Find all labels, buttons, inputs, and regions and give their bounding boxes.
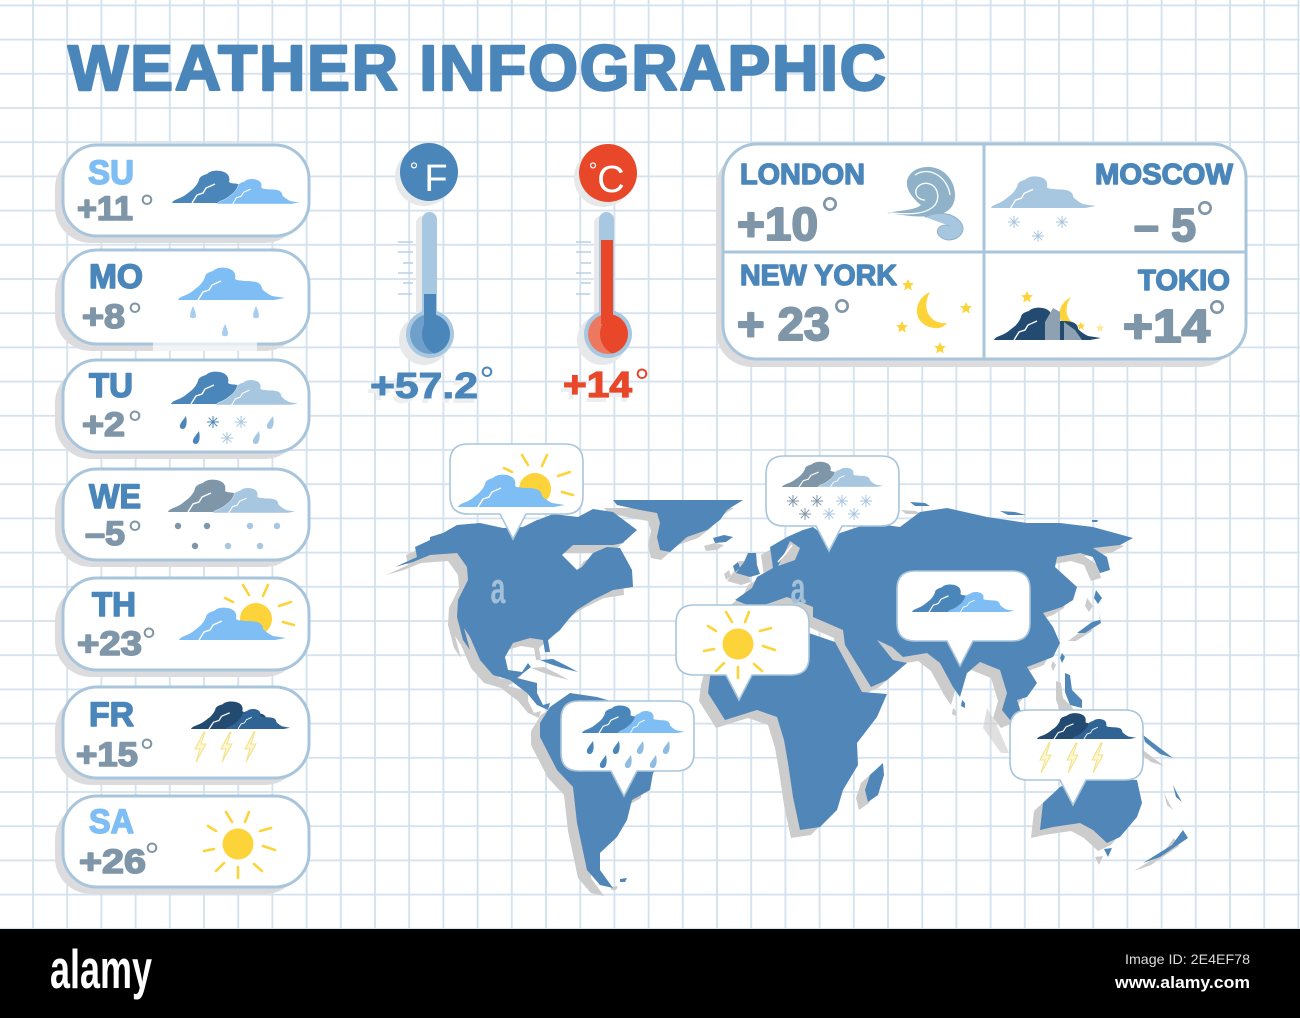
day card: Thursday: ° [141,621,157,663]
callout: Russia [766,456,899,551]
Celsius value: +14 [559,369,631,410]
panel: city temperatures [716,144,1246,367]
callout: Africa [676,605,809,700]
day card: Tuesday [55,360,309,459]
footer logo: alamy [50,938,152,1000]
callout: North America [450,444,583,539]
city: Tokio: ° [1207,290,1227,346]
day card: Friday: +15 [76,736,138,774]
day card: Thursday: +23 [77,625,142,663]
callout: Australia [1010,710,1143,805]
icon: Celsius badge: C [597,159,625,201]
day card: Wednesday: ° [127,514,143,556]
icon: Celsius badge: ° [589,158,597,183]
title: WEATHER INFOGRAPHIC [68,32,886,104]
city: New York [737,260,972,354]
map shadow [386,508,1179,896]
city: Moscow: – 5 [1134,199,1196,251]
Fahrenheit value: ° [479,360,495,402]
city: London: +10 [737,198,818,250]
day card: Tuesday: TU [89,367,133,405]
day card: Saturday: ° [144,836,160,878]
day card: Sunday: ° [139,188,155,230]
icon: Fahrenheit badge: ° [410,158,418,183]
city: New York: NEW YORK [740,260,897,292]
Fahrenheit value: +57.2 [370,365,478,406]
day card: Monday: +8 [82,298,125,336]
footer band [0,929,1300,1018]
icon: Fahrenheit badge [395,143,458,206]
day card: Wednesday: –5 [85,515,125,553]
panel: Celsius thermometer [559,144,650,410]
footer url: www.alamy.com [1114,973,1250,992]
day card: Sunday [55,145,309,243]
day card: Tuesday: +2 [82,406,125,444]
city: Moscow: ° [1195,191,1215,247]
day card: Thursday: TH [92,586,136,624]
city: London [737,159,963,250]
city: Tokio [994,265,1230,352]
day card: Friday: FR [89,696,134,734]
day card: Saturday: +26 [79,843,146,881]
city: London: LONDON [740,159,865,191]
map continents [395,500,1188,888]
day card: Saturday: SA [89,803,134,841]
Celsius value [559,362,650,410]
day card: Friday: ° [139,732,155,774]
Celsius value: ° [634,362,650,404]
day card: Sunday: SU [88,154,134,192]
day card: Monday: MO [89,258,143,296]
day card: Friday [55,687,309,785]
city: New York: + 23 [737,298,830,350]
city: Tokio: +14 [1123,300,1210,352]
city: Moscow [991,159,1234,251]
watermark letters [490,564,806,613]
day card: Tuesday: ° [127,404,143,446]
Fahrenheit value: +57.2 [366,370,476,411]
icon: Fahrenheit badge: F [424,158,448,200]
day card: Saturday [55,796,309,894]
day card: Thursday [55,578,309,677]
day card: Monday [55,250,309,351]
icon: Fahrenheit thermometer [398,212,454,365]
city: London: ° [820,187,840,243]
Fahrenheit value [366,360,495,411]
day card: Wednesday [55,469,309,567]
day card: Monday: ° [127,296,143,338]
icon: Celsius thermometer [576,212,632,365]
watermark letters: a [790,564,806,613]
panel: daily forecast [55,145,309,894]
city: New York: ° [832,289,852,345]
footer image id: Image ID: 2E4EF78 [1125,951,1250,967]
Celsius value: +14 [563,364,632,405]
panel: Fahrenheit thermometer [366,143,495,411]
watermark letters: a [490,564,506,613]
icon: Celsius badge [574,144,637,207]
day card: Sunday: +11 [77,190,133,228]
city: Moscow: MOSCOW [1095,159,1234,191]
city: Tokio: TOKIO [1138,265,1230,297]
day card: Wednesday: WE [89,478,141,516]
world map [386,500,1188,896]
callout: South America [561,701,694,796]
callout: Asia [897,571,1030,666]
